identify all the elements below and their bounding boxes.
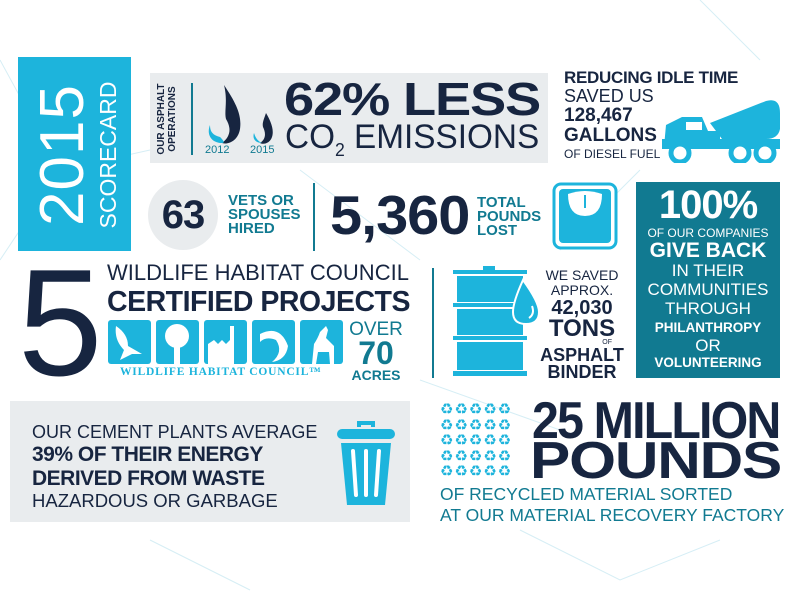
text: saved asphalt binder: ASPHALT (540, 345, 624, 365)
label: our asphalt operations: OUR ASPHALT (156, 83, 167, 155)
panel: 100% give back: OR (695, 336, 721, 355)
text: saved asphalt binder: WE SAVED (546, 267, 618, 283)
icon: barrel with drop (453, 266, 538, 376)
panel: cement plant energy: OUR CEMENT PLANTS AVERAGE (32, 422, 317, 442)
stat: 5,360 pounds lost: POUNDS (477, 208, 541, 225)
text: over 70 acres: OVER (349, 319, 403, 340)
stat: 63 vets hired: VETS OR (228, 192, 294, 209)
big number 5: 5 (18, 238, 103, 408)
label: our asphalt operations (156, 83, 178, 155)
stat: 5,360 pounds lost: LOST (477, 222, 517, 239)
subhead CO2 emissions: CO2 EMISSIONS (285, 118, 539, 160)
panel: cement plant energy: HAZARDOUS OR GARBAGE (32, 490, 278, 511)
panel: 100% give back (636, 182, 780, 378)
icon row: WHC logo (108, 320, 343, 378)
icon row: WHC logo: WILDLIFE HABITAT COUNCIL™ (120, 366, 321, 378)
panel: cement plant energy: DERIVED FROM WASTE (32, 467, 265, 490)
title block: 2015 scorecard (18, 57, 131, 251)
label: our asphalt operations: OPERATIONS (167, 86, 178, 152)
stat: 63 vets hired: HIRED (228, 220, 275, 237)
headline: 25 million pounds: 25 MILLION (532, 392, 779, 450)
text: reducing idle time: REDUCING IDLE TIME (564, 68, 738, 87)
text: saved asphalt binder: OF (602, 339, 612, 346)
icon: flames 2012 2015: 2012 (205, 144, 229, 156)
panel: 100% give back: COMMUNITIES (648, 280, 768, 299)
text: over 70 acres: 70 (358, 335, 394, 371)
panel: 100% give back: THROUGH (665, 299, 751, 318)
icon: cement truck (662, 100, 780, 163)
panel: 100% give back: PHILANTHROPY (655, 320, 761, 335)
headline 62% less: 62% LESS (284, 73, 540, 125)
text: reducing idle time: SAVED US (564, 86, 654, 106)
stat: 63 vets hired (148, 180, 301, 250)
panel: 100% give back: IN THEIR (672, 261, 744, 280)
panel: cement plant energy (10, 401, 410, 522)
panel: CO2 emissions (150, 73, 548, 163)
text: over 70 acres (349, 319, 403, 383)
text: certified projects: CERTIFIED PROJECTS (107, 286, 410, 318)
panel: 100% give back: GIVE BACK (650, 239, 766, 262)
stat: 5,360 pounds lost: 5,360 (330, 184, 469, 246)
stat: 5,360 pounds lost: TOTAL (477, 194, 526, 211)
stat: 63 vets hired: SPOUSES (228, 206, 301, 223)
panel: 100% give back: VOLUNTEERING (654, 355, 762, 370)
panel: 100% give back: OF OUR COMPANIES (647, 226, 769, 240)
text: over 70 acres: ACRES (351, 367, 400, 383)
title year: 2015 (28, 84, 97, 226)
title word: SCORECARD (95, 82, 121, 228)
text: saved asphalt binder: APPROX. (551, 282, 613, 298)
text: saved asphalt binder: 42,030 (551, 297, 613, 319)
icon grid: recycle symbols: ♻♻♻♻♻ ♻♻♻♻♻ ♻♻♻♻♻ ♻♻♻♻♻ ♻♻♻♻♻ (440, 401, 512, 480)
panel: 100% give back: 100% (659, 183, 757, 227)
icon: flames 2012 2015: 2015 (250, 144, 274, 156)
text: saved asphalt binder (540, 267, 624, 382)
subtext: recycled material (440, 484, 784, 525)
text: reducing idle time: OF DIESEL FUEL (564, 147, 660, 161)
text: wildlife habitat council: WILDLIFE HABITAT COUNCIL (107, 260, 409, 285)
icon: trash can (337, 421, 395, 505)
panel: cement plant energy: 39% OF THEIR ENERGY (32, 443, 263, 466)
subtext: recycled material: OF RECYCLED MATERIAL SORTED (440, 484, 732, 504)
text: reducing idle time: GALLONS (564, 125, 657, 146)
subtext: recycled material: AT OUR MATERIAL RECOVERY FACTORY (440, 505, 784, 525)
text: POUNDS (530, 432, 781, 490)
text: saved asphalt binder: BINDER (547, 362, 616, 382)
stat: 5,360 pounds lost (330, 184, 541, 246)
stat: 63 vets hired: 63 (162, 193, 204, 237)
text: reducing idle time (564, 68, 738, 161)
text: saved asphalt binder: TONS (549, 315, 615, 342)
icon: flames 2012 2015 (205, 85, 274, 156)
text: reducing idle time: 128,467 (564, 105, 633, 126)
icon: scale (552, 182, 618, 250)
